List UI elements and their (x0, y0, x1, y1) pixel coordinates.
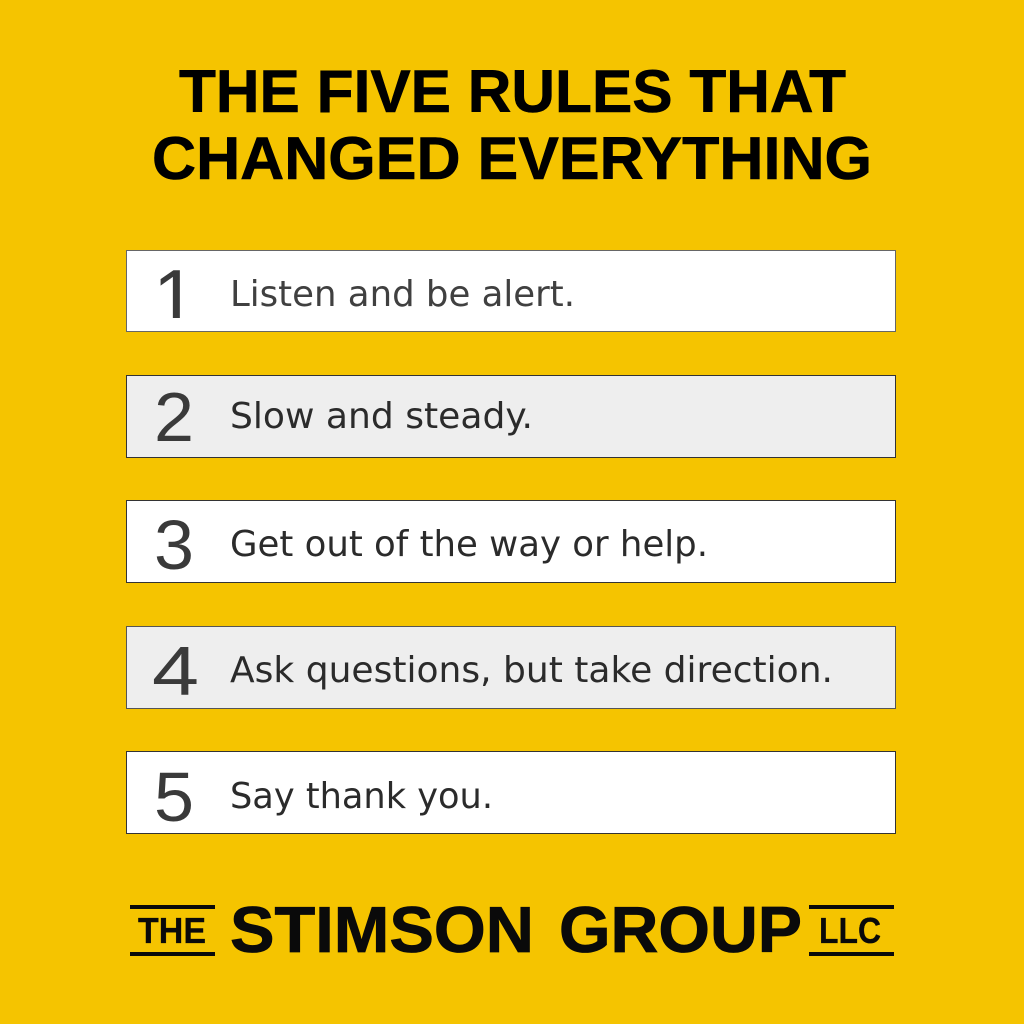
logo: LLC mark (809, 905, 894, 956)
logo: THE mark: THE (138, 910, 206, 951)
logo: LLC mark: LLC (819, 910, 881, 951)
logo: company name: GROUP (559, 893, 802, 966)
panel: rule 5 (126, 752, 896, 836)
logo: The Stimson Group LLC (130, 893, 894, 966)
panel: rule 1: 1 (153, 252, 197, 342)
title: CHANGED EVERYTHING (152, 125, 872, 192)
panel: rule 2: Slow and steady. (230, 396, 533, 437)
title: THE FIVE RULES THAT (179, 58, 846, 125)
panel: rule 3 (126, 500, 896, 584)
logo: THE mark (130, 905, 215, 956)
panel: rule 4: 4 (152, 632, 199, 710)
logo: company name: STIMSON (230, 893, 534, 966)
panel: rule 5: Say thank you. (230, 776, 493, 817)
title (152, 58, 872, 192)
panel: rule 4: Ask questions, but take direction. (230, 650, 833, 691)
panel: rule 5: 5 (154, 758, 194, 836)
panel: rule 2: 2 (154, 378, 194, 456)
panel: rule 2 (126, 376, 896, 458)
panel: rule 1: Listen and be alert. (230, 274, 575, 315)
panel: rule 3: 3 (154, 506, 194, 584)
logo: company name (230, 893, 802, 966)
panel: rule 4 (126, 626, 896, 710)
panel: rule 1 (126, 250, 896, 342)
panel: rule 3: Get out of the way or help. (230, 524, 708, 565)
